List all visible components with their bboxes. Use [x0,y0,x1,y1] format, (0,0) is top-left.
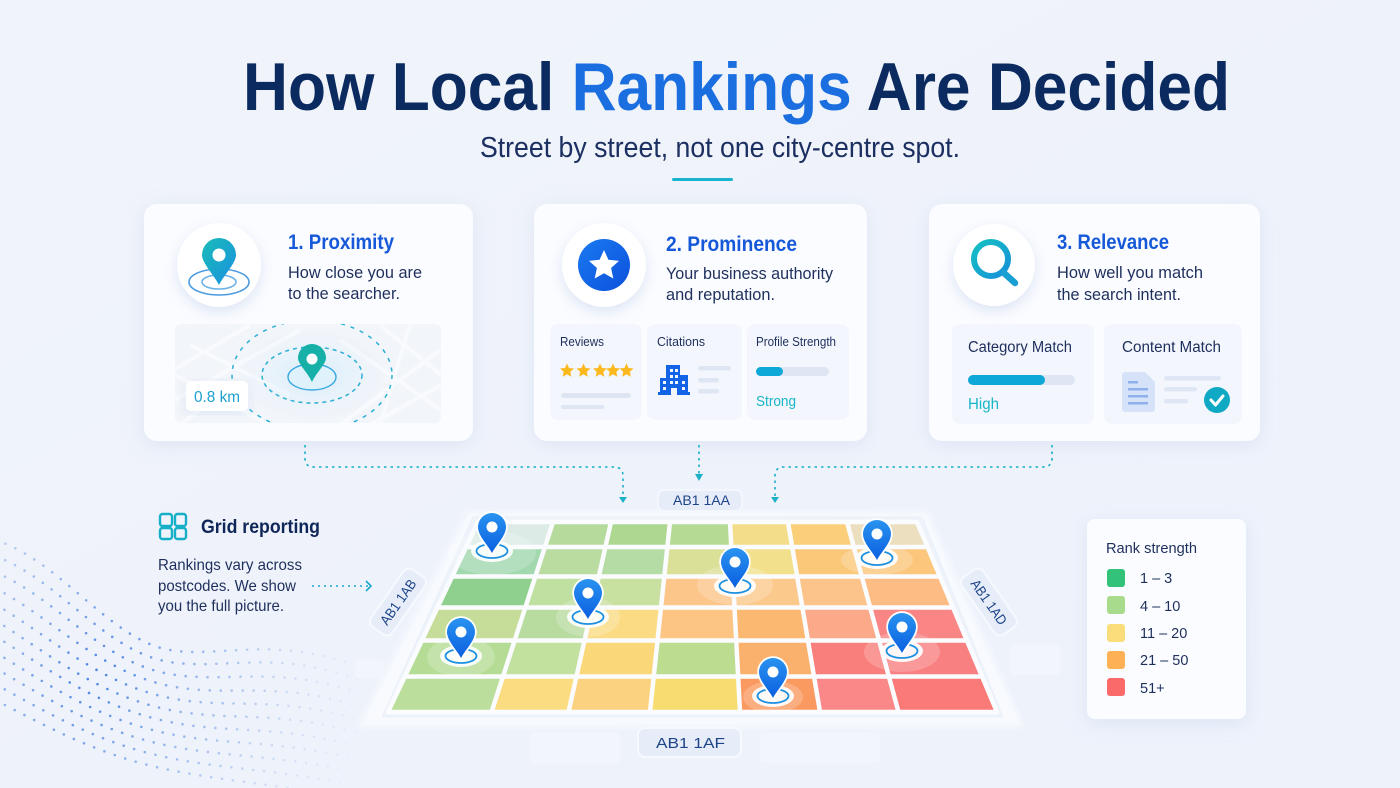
map pin [440,618,482,667]
icon: proximity pin [177,223,261,307]
postcode label: AB1 1AA [658,490,742,511]
content match tile: Content Match [1122,339,1221,356]
legend item: 11 to 20 [1107,624,1187,642]
connector: proximity to grid [305,445,627,503]
icon: magnifier [953,224,1035,306]
map pin [714,548,756,597]
panel: prominence [534,204,867,441]
postcode label: AB1 1AB: AB1 1AB [377,576,419,628]
relevance description: the search intent. [1057,285,1181,304]
legend item: 21 to 50: 21 – 50 [1140,653,1188,669]
postcode label: AB1 1AD: AB1 1AD [968,576,1010,628]
connector: prominence to grid [695,445,703,481]
prominence description: and reputation. [666,285,775,304]
postcode label: AB1 1AD [958,566,1020,638]
postcode label: AB1 1AA: AB1 1AA [673,492,731,508]
icon: grid [160,514,186,539]
grid reporting heading: Grid reporting [201,517,320,538]
map pin [856,520,898,569]
panel: proximity [144,204,473,441]
prominence description [666,264,833,304]
faint street backdrop [355,645,1060,763]
profile strength tile: Profile Strength [756,334,836,349]
icon: five stars [560,364,634,377]
reviews tile [550,324,642,420]
grid reporting description: you the full picture. [158,598,284,615]
rank heatmap grid [358,512,1024,727]
reviews tile: Reviews [560,334,604,349]
legend item: 4 to 10 [1107,596,1180,615]
relevance description: How well you match [1057,263,1203,282]
icon: building [658,365,690,395]
postcode label: AB1 1AB [367,566,429,638]
profile strength tile: Strong [756,393,796,410]
category match tile: High [968,396,999,413]
proximity description: to the searcher. [288,284,400,303]
citations tile: Citations [657,334,705,349]
legend item: 1 to 3 [1107,569,1172,587]
prominence description: Your business authority [666,264,833,283]
grid reporting block [158,514,371,615]
relevance description [1057,263,1203,304]
proximity description: How close you are [288,263,422,282]
connector: relevance to grid [771,445,1052,503]
proximity map [175,324,441,423]
profile strength tile [747,324,849,420]
proximity description [288,263,422,303]
proximity heading: 1. Proximity [288,231,394,254]
category match tile [952,324,1094,424]
legend item: 1 to 3: 1 – 3 [1140,571,1172,587]
heatmap cells [388,522,997,712]
distance label [186,381,248,411]
subtitle: Street by street, not one city-centre spot. [480,132,960,164]
dotted wave decoration [3,542,352,788]
grid reporting description: postcodes. We show [158,578,296,595]
map pin [567,579,609,628]
content match tile [1104,324,1242,424]
prominence heading: 2. Prominence [666,233,797,256]
grid reporting description: Rankings vary across [158,557,302,574]
category match tile: Category Match [968,339,1072,356]
legend item: 11 to 20: 11 – 20 [1140,626,1187,642]
legend item: 51 plus: 51+ [1140,681,1165,697]
relevance heading: 3. Relevance [1057,231,1169,254]
distance label: 0.8 km [194,389,240,406]
title: How Local Rankings Are Decided [243,49,1230,125]
icon: document [1122,372,1155,412]
arrow: to grid [312,581,371,591]
map pin [881,613,923,662]
title accent rule [672,178,733,181]
legend item: 51 plus [1107,678,1165,697]
map pin [752,658,794,707]
legend: rank strength: Rank strength [1106,541,1197,557]
map pin [471,513,513,562]
grid lines [388,522,997,712]
icon: star badge [562,223,646,307]
legend: rank strength [1087,519,1246,719]
postcode label: AB1 1AF [638,728,741,757]
grid reporting description [158,557,302,615]
pin halos [427,531,940,713]
postcode label: AB1 1AF: AB1 1AF [656,735,725,752]
panel: relevance [929,204,1260,441]
legend item: 4 to 10: 4 – 10 [1140,599,1180,615]
icon: check badge [1204,387,1230,413]
legend item: 21 to 50 [1107,651,1188,669]
citations tile [647,324,742,420]
